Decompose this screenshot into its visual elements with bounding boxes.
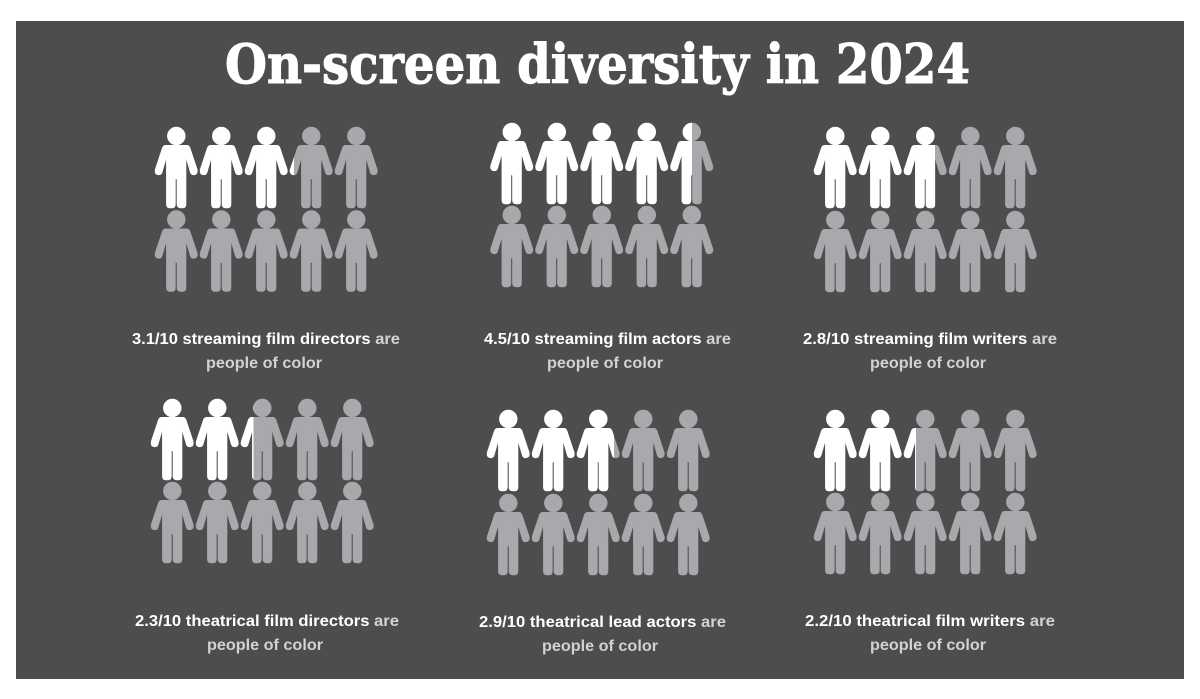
panel: streaming film actors [484, 123, 731, 372]
caption [484, 331, 731, 372]
panel: theatrical film directors [135, 399, 399, 654]
caption: 3.1/10 streaming film directors are [132, 331, 400, 348]
caption: people of color [207, 637, 323, 654]
caption: 2.9/10 theatrical lead actors are [479, 614, 726, 631]
caption [135, 613, 399, 654]
caption: 4.5/10 streaming film actors are [484, 331, 731, 348]
caption: people of color [870, 637, 986, 654]
caption [805, 613, 1055, 654]
caption [479, 614, 726, 655]
caption: people of color [870, 355, 986, 372]
caption [132, 331, 400, 372]
pictogram: 2.3 of 10 [151, 399, 373, 563]
pictogram: 2.9 of 10 [487, 410, 709, 575]
title: On-screen diversity in 2024 [225, 32, 970, 96]
caption: people of color [206, 355, 322, 372]
panel: streaming film writers [803, 127, 1057, 372]
caption [803, 331, 1057, 372]
pictogram: 2.2 of 10 [814, 410, 1036, 574]
pictogram: 3.1 of 10 [155, 127, 377, 291]
pictogram: 2.8 of 10 [814, 127, 1036, 292]
panel: streaming film directors [132, 127, 400, 372]
panel: theatrical lead actors [479, 410, 726, 655]
pictogram: 4.5 of 10 [491, 123, 713, 287]
caption: people of color [542, 638, 658, 655]
caption: 2.3/10 theatrical film directors are [135, 613, 399, 630]
panel: theatrical film writers [805, 410, 1055, 654]
caption: 2.2/10 theatrical film writers are [805, 613, 1055, 630]
caption: people of color [547, 355, 663, 372]
caption: 2.8/10 streaming film writers are [803, 331, 1057, 348]
